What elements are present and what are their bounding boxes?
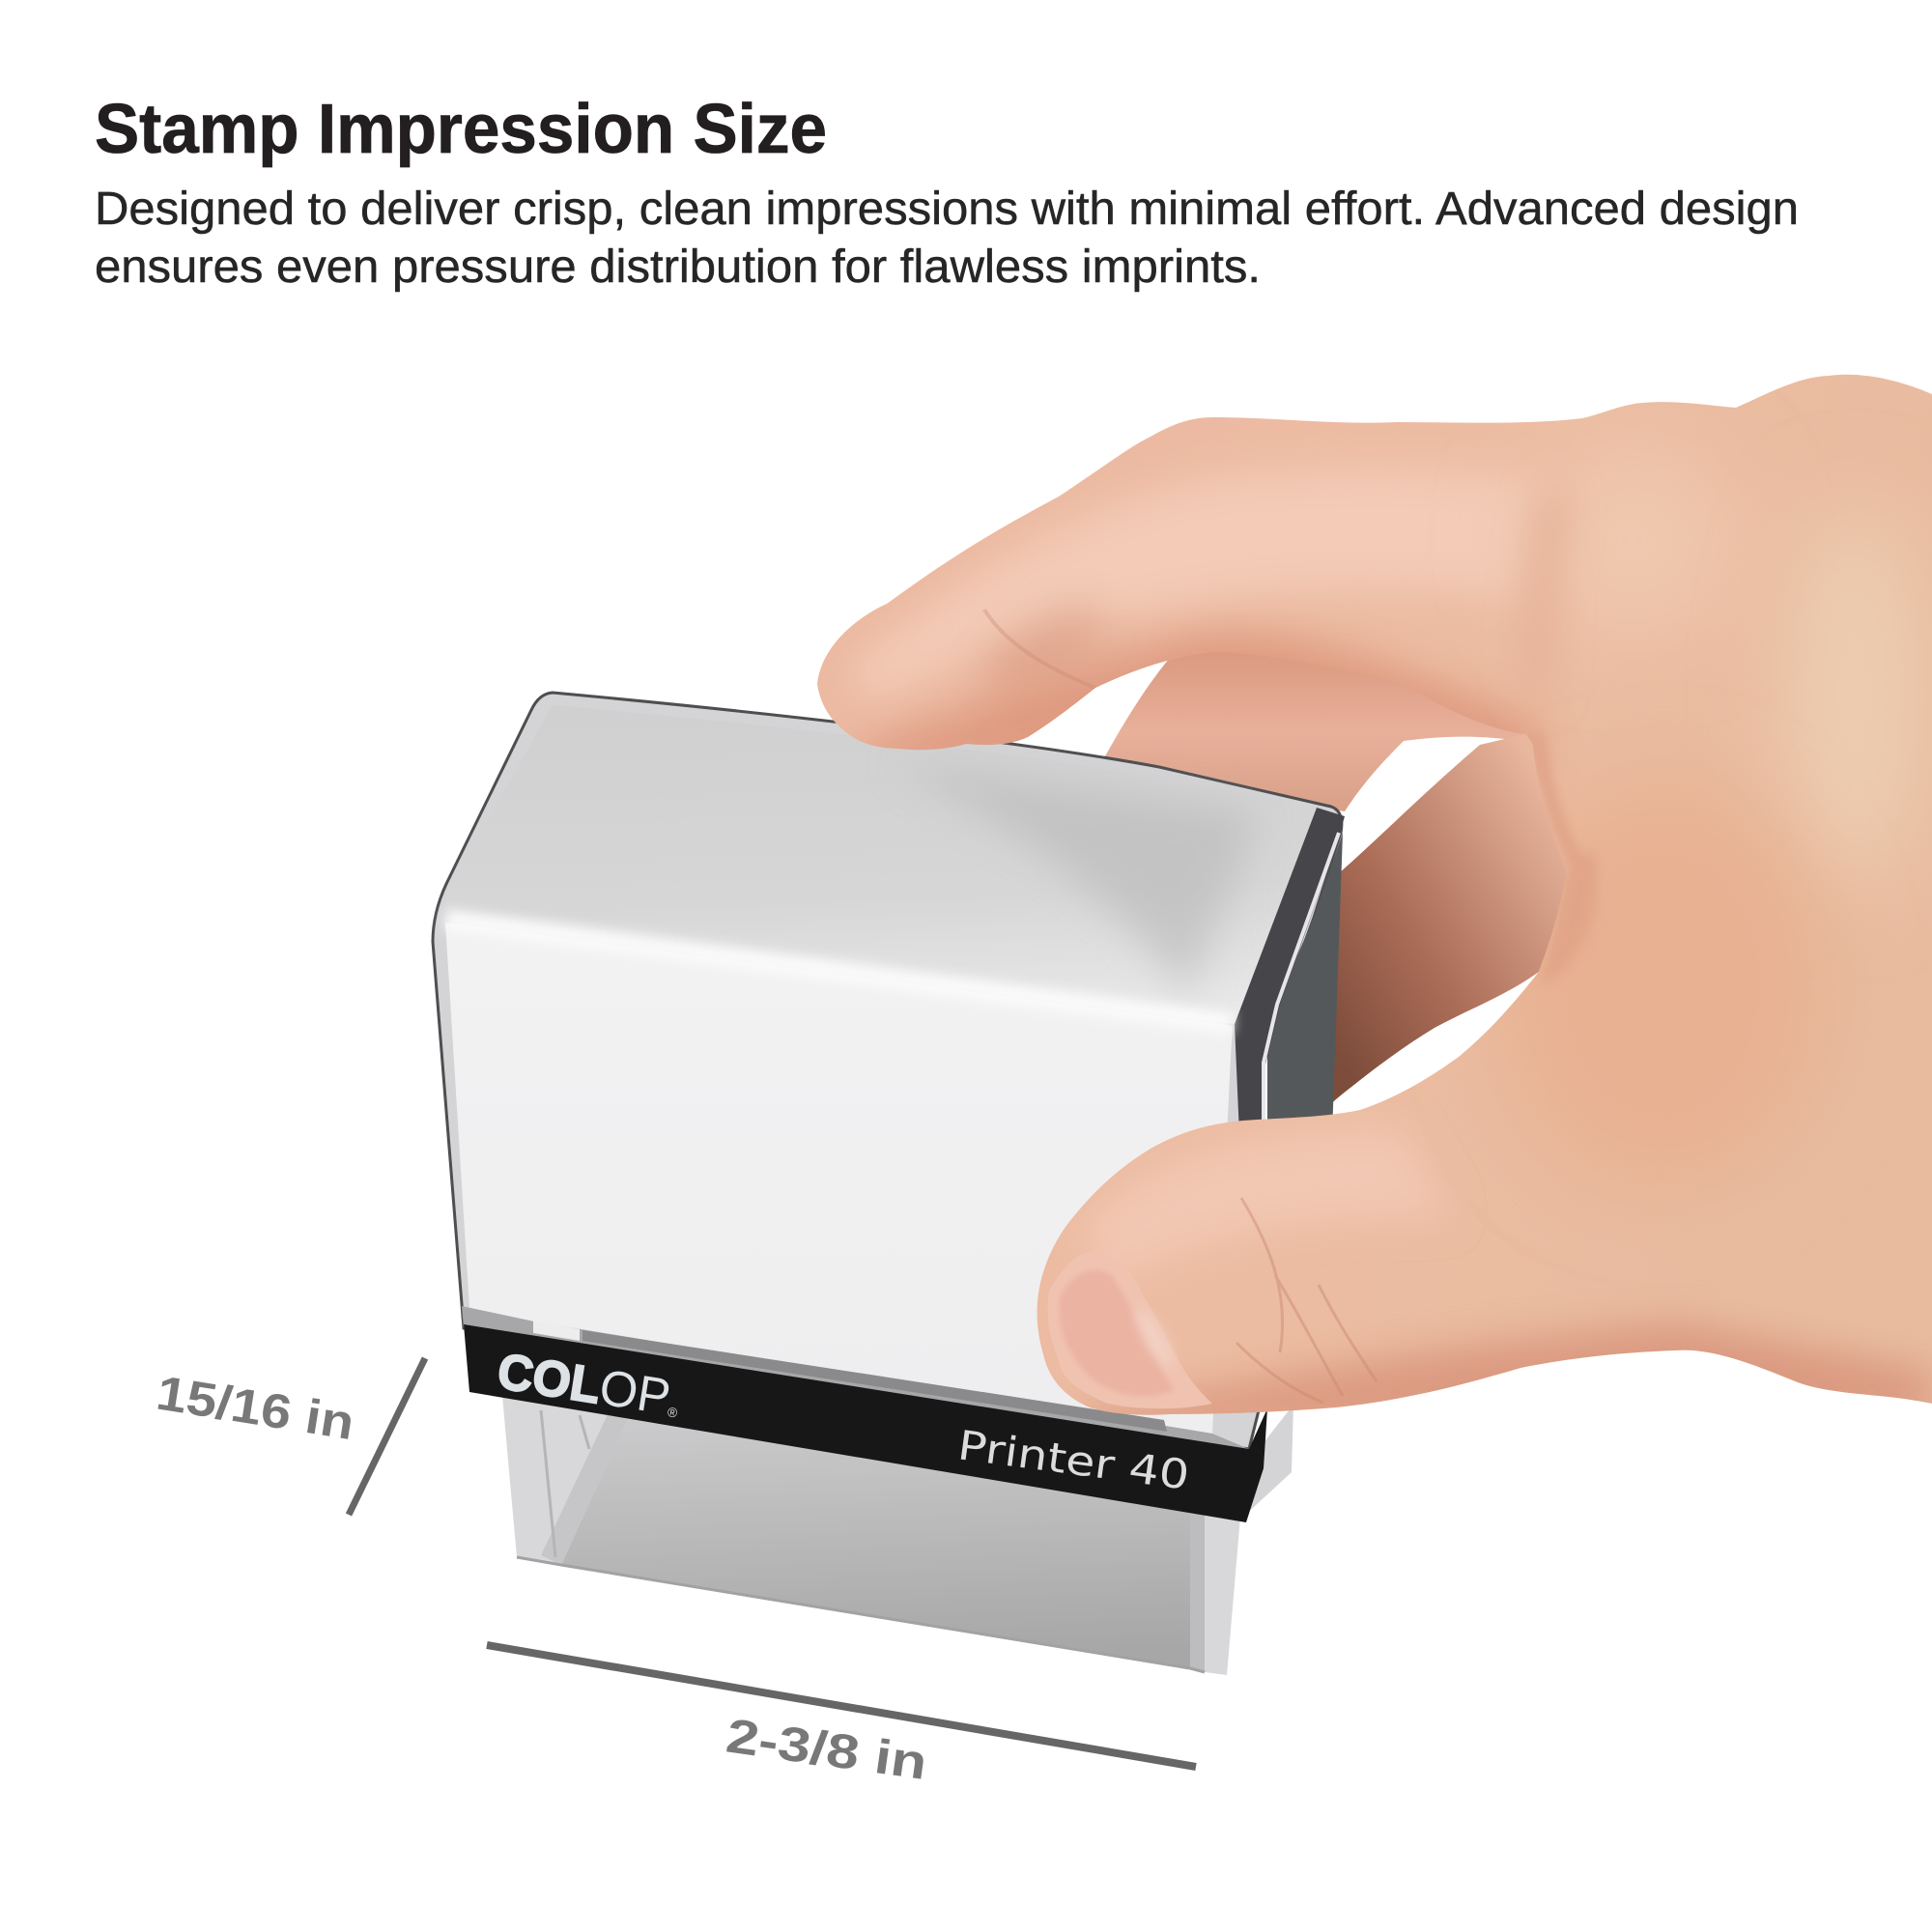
paper label front face — [445, 923, 1233, 1434]
description text — [95, 184, 1799, 293]
dark right side of mechanism — [1267, 833, 1343, 1135]
hand: index finger, palm and thumb — [811, 367, 1932, 1430]
ring finger — [1323, 729, 1575, 1111]
thumb nail — [1047, 1251, 1212, 1408]
nail lunula — [1134, 1312, 1175, 1364]
width label: 2-3/8 in — [723, 1708, 930, 1790]
black band — [464, 1324, 1267, 1522]
index finger crease — [984, 610, 1095, 688]
hand: back fingers behind the stamp — [1101, 638, 1575, 1111]
model name: Printer 40 — [955, 1421, 1192, 1499]
logo: COLOP: COLOP — [494, 1344, 676, 1426]
top face reflection — [889, 763, 1256, 995]
width dimension line — [487, 1645, 1196, 1767]
bottom lip of cap — [462, 1306, 1249, 1449]
thumb underside shade — [1063, 1323, 1932, 1430]
description text: Designed to deliver crisp, clean impressions with minimal effort. Advanced design — [95, 184, 1799, 235]
knuckle highlight — [1572, 463, 1718, 620]
palm tone — [1497, 782, 1826, 1188]
index finger highlight — [850, 469, 1546, 705]
palm crease to web of thumb — [1546, 861, 1595, 978]
height dimension line — [349, 1358, 425, 1515]
middle finger — [1101, 638, 1546, 811]
height label: 15/16 in — [153, 1366, 358, 1450]
clear cap — [433, 693, 1342, 1449]
description text: ensures even pressure distribution for flawless imprints. — [95, 242, 1261, 293]
logo: COLOP: ® — [667, 1404, 679, 1421]
thumb top highlight — [1091, 1130, 1434, 1271]
stamp — [433, 693, 1345, 1675]
bend highlight — [445, 920, 1233, 1024]
fingertip shadow — [983, 600, 1103, 684]
title: Stamp Impression Size — [95, 91, 827, 168]
back of hand light area — [1787, 502, 1922, 889]
thumb knuckle creases — [1236, 1198, 1377, 1403]
paper label top face — [445, 705, 1317, 1024]
index finger underside shade — [850, 633, 1546, 773]
dark corner rim — [1235, 808, 1345, 1135]
clear base — [502, 1396, 1293, 1675]
